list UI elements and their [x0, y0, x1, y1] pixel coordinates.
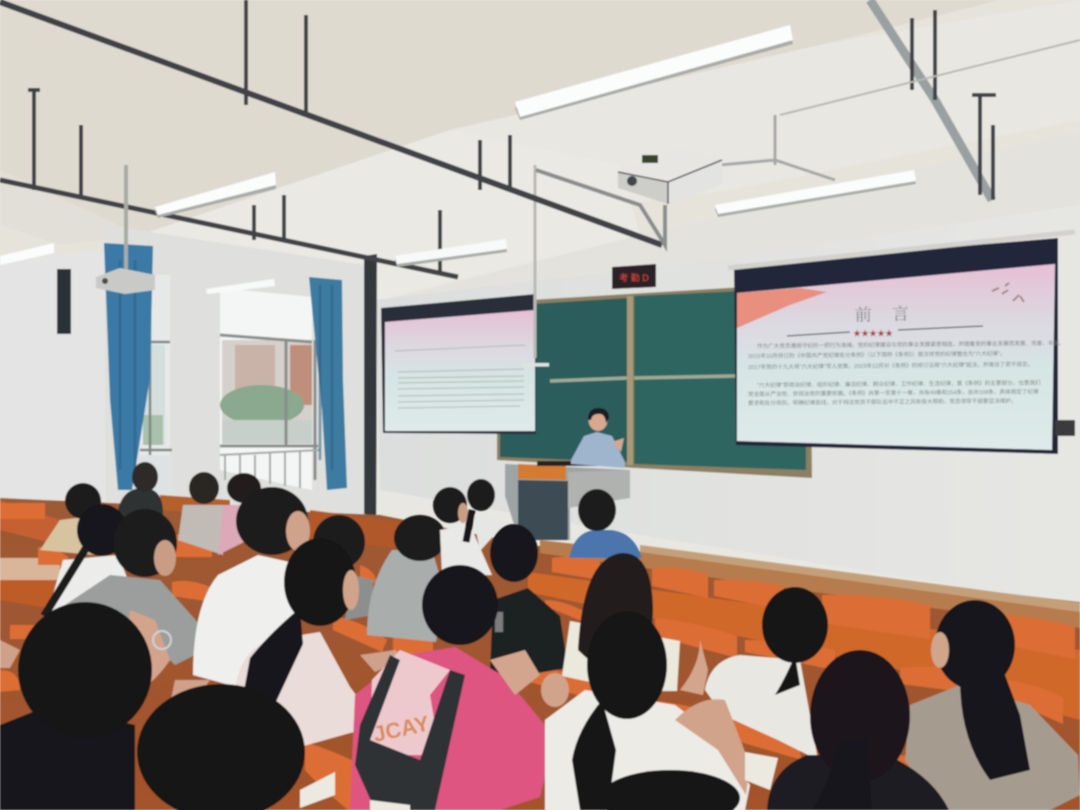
slide birds — [992, 283, 1024, 302]
ceiling light right top — [515, 25, 793, 120]
student: front head bottom left — [137, 684, 305, 810]
student: white blouse left — [44, 504, 130, 625]
student: ponytail white shirt right — [705, 587, 828, 760]
left wall — [0, 250, 105, 500]
student: ponytail pink-white top — [235, 538, 405, 747]
student: man in blue shirt — [569, 489, 642, 558]
left desk row — [310, 510, 400, 548]
ceiling fan — [720, 115, 835, 180]
window left — [140, 275, 172, 495]
slide body text: 2017年党的十九大将"六大纪律"写入党章，2023年12月对《条例》的修订沿用"六大纪律"提法，并增设了若干规定。 — [748, 360, 1033, 371]
curtain left — [104, 243, 153, 490]
wall section between windows — [105, 225, 365, 515]
slide title: 前 言 — [854, 299, 917, 326]
orange chairs — [0, 503, 1075, 810]
ceiling light center — [395, 239, 507, 267]
curtain right — [309, 277, 347, 490]
digital clock display — [612, 264, 656, 289]
student: distant left group — [40, 462, 261, 555]
shirt letters: JCAY — [371, 711, 432, 747]
student: long hair white shirt — [562, 553, 708, 695]
digital clock display: 考 勤 D — [619, 272, 649, 283]
student: dark head bottom centre — [600, 770, 740, 810]
dark pillar strip — [364, 254, 377, 516]
floor and desk mass — [0, 498, 1080, 810]
slide body text: 2015年10月修订的《中国共产党纪律处分条例》（以下简称《条例》）首次将党的纪律整合为"六大纪律"。 — [748, 349, 1006, 360]
slide body text: 党全面从严治党、依规治党的重要依据。《条例》共第一至第十一章，共有49章和154条，总共108条，具体规定了纪律 — [748, 387, 1039, 398]
right projection screen — [734, 238, 1065, 454]
student: grey top far right — [905, 600, 1080, 810]
ceiling light center left — [155, 172, 276, 218]
slide body text: 作为广大党员遵规守纪的一把行为准绳，党的纪律建设与党的事业发展紧密相连，并随着党的事业发展而发展、完善、丰富。 — [757, 339, 1065, 350]
slide red banner — [737, 288, 827, 328]
student: black shirt — [490, 524, 568, 673]
window right — [220, 288, 320, 490]
vertical screen pole — [534, 165, 536, 358]
slide body text: "六大纪律"即政治纪律、组织纪律、廉洁纪律、群众纪律、工作纪律、生活纪律，是《条例》的主要部分，也是我们 — [757, 379, 1041, 389]
slide divider with stars: ★★★★★ — [853, 329, 893, 338]
projector left — [96, 268, 155, 294]
left projection screen — [381, 294, 536, 434]
ceiling light left — [0, 243, 54, 265]
student: pink top with black apron and letters — [350, 565, 555, 810]
podium — [505, 461, 630, 540]
slide body text: 要求和处分规则，明确纪律底线，对于纯洁党员干部队伍中不正之风有极大帮助，党员领导干部要坚决维护。 — [748, 397, 1017, 407]
slide divider with stars — [787, 326, 983, 338]
ceiling light center right — [715, 170, 916, 217]
student: grey jacket left — [65, 509, 200, 665]
front wall — [375, 205, 1080, 605]
student: grey hoodie — [367, 515, 446, 642]
right wall pipe and outlet — [728, 232, 1075, 268]
slide body text — [748, 339, 1065, 407]
ceiling pipes — [0, 0, 1080, 277]
ceiling — [0, 0, 1080, 320]
ceiling light window — [206, 279, 275, 294]
student: front dark right — [767, 650, 949, 810]
student: white shirt far centre — [433, 479, 505, 575]
student: ponytail white front centre — [541, 611, 750, 810]
student: white shirt with glasses — [193, 487, 310, 690]
speaker — [571, 408, 625, 468]
blackboard — [497, 283, 812, 478]
notebooks on desks — [300, 752, 778, 810]
student: row two middle — [313, 515, 373, 620]
projector main — [618, 148, 722, 204]
wall speaker — [57, 269, 71, 334]
far desks and wood countertop — [0, 495, 1080, 720]
student: front left with glasses — [0, 602, 210, 810]
